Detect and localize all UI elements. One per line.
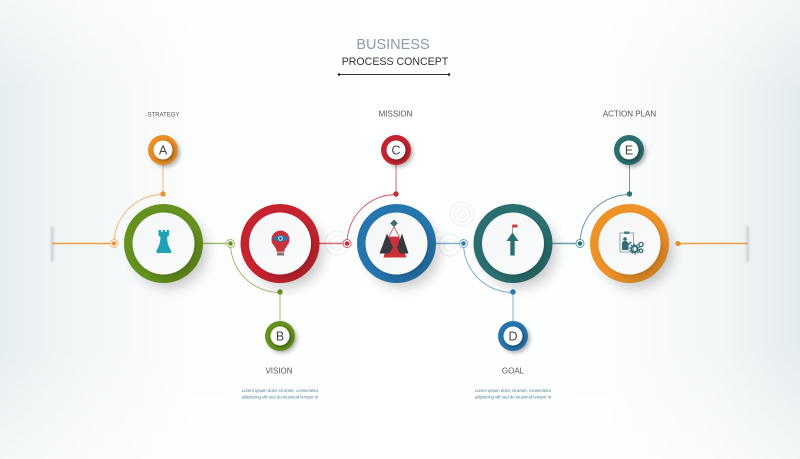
big circle 4: teal, arrow flag: [474, 204, 556, 288]
title: PROCESS CONCEPT: [342, 56, 449, 68]
end bar: right: [746, 226, 749, 262]
connector: red line: [318, 243, 347, 244]
title: [338, 37, 450, 76]
icon: mountains: [380, 220, 408, 258]
text block: vision: Lorem ipsum dolor sit amet, consectetur: [242, 388, 319, 393]
big circle 5: orange, planning: [590, 204, 673, 288]
label: action plan: ACTION PLAN: [603, 110, 656, 118]
small circle C: [381, 135, 413, 167]
connector: left lead line: [52, 243, 114, 244]
small circle D: D: [508, 330, 518, 344]
connector E: [576, 165, 632, 248]
text block: goal: adipiscing elit sed do eiusmod tempor in: [475, 394, 552, 400]
big circle 2: red, light bulb with eye: [240, 204, 324, 288]
big circle 3: blue, mountains: [357, 204, 440, 288]
connector: teal line: [550, 243, 580, 244]
small circle D: [498, 321, 530, 353]
icon: clipboard, person, gears: [620, 232, 643, 254]
label: strategy: STRATEGY: [148, 112, 179, 118]
connector: blue line: [434, 243, 463, 244]
small circle C: C: [391, 144, 401, 158]
watermark spirals: [325, 202, 474, 256]
icon: arrow with flag: [507, 224, 518, 256]
small circle E: [614, 135, 646, 167]
end bar: left: [51, 226, 54, 262]
connector A: [110, 165, 166, 248]
connector C: [343, 165, 399, 248]
small circle A: [148, 135, 180, 167]
text block: goal: [475, 388, 552, 400]
text block: vision: adipiscing elit sed do eiusmod tempor in: [242, 394, 319, 400]
big circle 1: green, chess rook: [124, 204, 207, 288]
label: vision: VISION: [265, 366, 293, 376]
connector: green line: [200, 243, 230, 244]
text block: goal: Lorem ipsum dolor sit amet, consectetur: [475, 388, 552, 393]
connector: right lead line: [678, 243, 748, 244]
right end dot: [675, 241, 681, 246]
small circle A: A: [159, 144, 168, 158]
small circle B: [265, 321, 297, 353]
label: mission: MISSION: [379, 110, 413, 118]
icon: light bulb: [271, 230, 290, 256]
connector D: [460, 240, 516, 322]
icon: chess rook: [156, 230, 171, 253]
title: BUSINESS: [356, 37, 430, 53]
small circle E: E: [625, 144, 633, 158]
small circle B: B: [276, 330, 284, 344]
text block: vision: [242, 388, 319, 400]
connector B: [226, 240, 283, 322]
label: goal: GOAL: [502, 366, 525, 376]
